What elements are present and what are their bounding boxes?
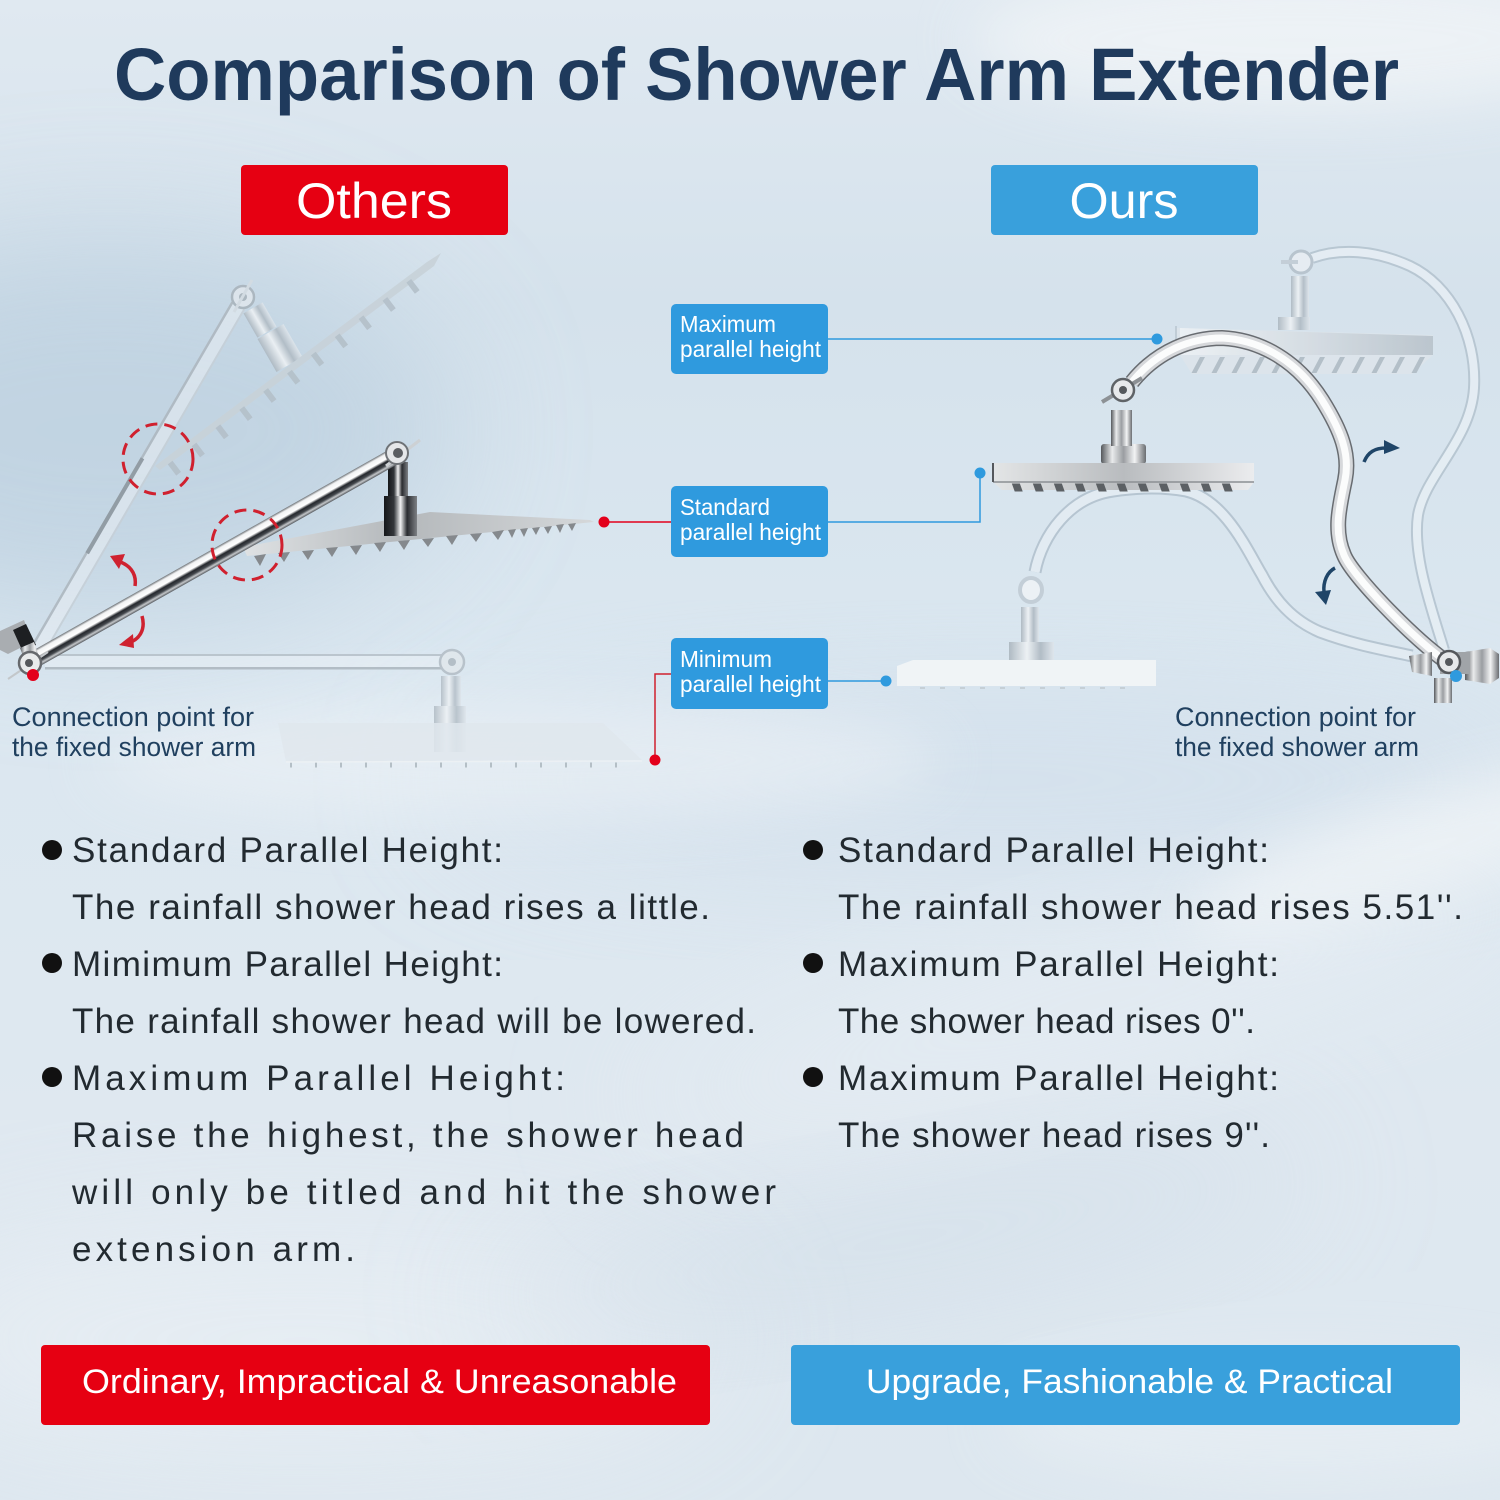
diagram: others shower arm extender bbox=[0, 253, 642, 765]
shower head: standard position bbox=[993, 410, 1254, 490]
callout: standard parallel height bbox=[598, 468, 986, 557]
arrow: navy up bbox=[1364, 440, 1400, 462]
verdict banner: ours: Upgrade, Fashionable & Practical bbox=[866, 1363, 1393, 1401]
badge: Ours: Ours bbox=[1070, 173, 1178, 229]
main curved arm bbox=[1132, 338, 1444, 660]
verdict banner: others bbox=[41, 1345, 710, 1425]
arrow: red up bbox=[110, 554, 135, 586]
caption: ours connection point: the fixed shower arm bbox=[1175, 732, 1419, 762]
callout: minimum parallel height: Minimum bbox=[680, 646, 772, 672]
main extension arm bbox=[26, 445, 406, 669]
verdict banner: ours bbox=[791, 1345, 1460, 1425]
callout: standard parallel height: Standard bbox=[680, 494, 770, 520]
text block: ours details: Maximum Parallel Height: bbox=[838, 945, 1279, 984]
text block: ours details: Standard Parallel Height: bbox=[838, 831, 1269, 870]
text block: others details: extension arm. bbox=[72, 1230, 355, 1269]
text block: others details: Raise the highest, the shower head bbox=[72, 1116, 744, 1155]
badge: Others bbox=[241, 165, 508, 235]
title: Comparison of Shower Arm Extender bbox=[114, 33, 1399, 116]
text block: ours details: Maximum Parallel Height: bbox=[838, 1059, 1279, 1098]
text block: others details: Mimimum Parallel Height: bbox=[72, 945, 503, 984]
callout: maximum parallel height bbox=[671, 304, 1162, 374]
arrow: red down bbox=[119, 616, 143, 648]
neck: black chrome connector bbox=[384, 462, 417, 536]
arrow: navy down bbox=[1315, 568, 1335, 605]
text block: ours details: The shower head rises 0''. bbox=[838, 1002, 1255, 1041]
connection point dot bbox=[27, 669, 39, 681]
callout: minimum parallel height bbox=[650, 638, 892, 766]
callout: maximum parallel height: Maximum bbox=[680, 311, 776, 337]
diagram: ours shower arm extender bbox=[897, 251, 1499, 703]
text block: others details: The rainfall shower head will be lowered. bbox=[72, 1002, 756, 1041]
verdict banner: others: Ordinary, Impractical & Unreasonable bbox=[82, 1363, 677, 1401]
caption: ours connection point bbox=[1175, 702, 1419, 762]
caption: others connection point bbox=[12, 702, 256, 762]
text block: others details: Standard Parallel Height: bbox=[72, 831, 503, 870]
callout: standard parallel height: parallel height bbox=[680, 519, 822, 545]
ghost arm: raised to maximum bbox=[25, 253, 441, 664]
ghost arm: lowered to minimum bbox=[45, 650, 642, 765]
badge: Ours bbox=[991, 165, 1258, 235]
badge: Others: Others bbox=[296, 173, 452, 229]
shower head plate: standard position bbox=[243, 512, 594, 566]
caption: others connection point: Connection point for bbox=[12, 702, 254, 732]
callout: minimum parallel height: parallel height bbox=[680, 671, 822, 697]
text block: others details: Maximum Parallel Height: bbox=[72, 1059, 565, 1098]
base fitting bbox=[1409, 648, 1499, 703]
red dashed circle: collision point, max bbox=[123, 424, 193, 494]
caption: others connection point: the fixed shower arm bbox=[12, 732, 256, 762]
red dashed circle: collision point, standard bbox=[212, 510, 282, 580]
text block: others details: will only be titled and hit the shower bbox=[71, 1173, 776, 1212]
ghost: maximum height position bbox=[1176, 251, 1474, 650]
text block: others details: The rainfall shower head rises a little. bbox=[72, 888, 710, 927]
callout: maximum parallel height: parallel height bbox=[680, 336, 822, 362]
text block: ours details: The shower head rises 9''. bbox=[838, 1116, 1270, 1155]
ghost: minimum height position bbox=[897, 488, 1412, 688]
text block: ours details bbox=[803, 831, 1463, 1155]
text block: others details bbox=[42, 831, 776, 1269]
text block: ours details: The rainfall shower head rises 5.51''. bbox=[838, 888, 1463, 927]
connection point dot bbox=[1450, 670, 1462, 682]
caption: ours connection point: Connection point for bbox=[1175, 702, 1416, 732]
base fitting bbox=[0, 620, 48, 679]
swivel joint: top bbox=[1102, 378, 1142, 402]
swivel joint: top bbox=[386, 440, 420, 466]
